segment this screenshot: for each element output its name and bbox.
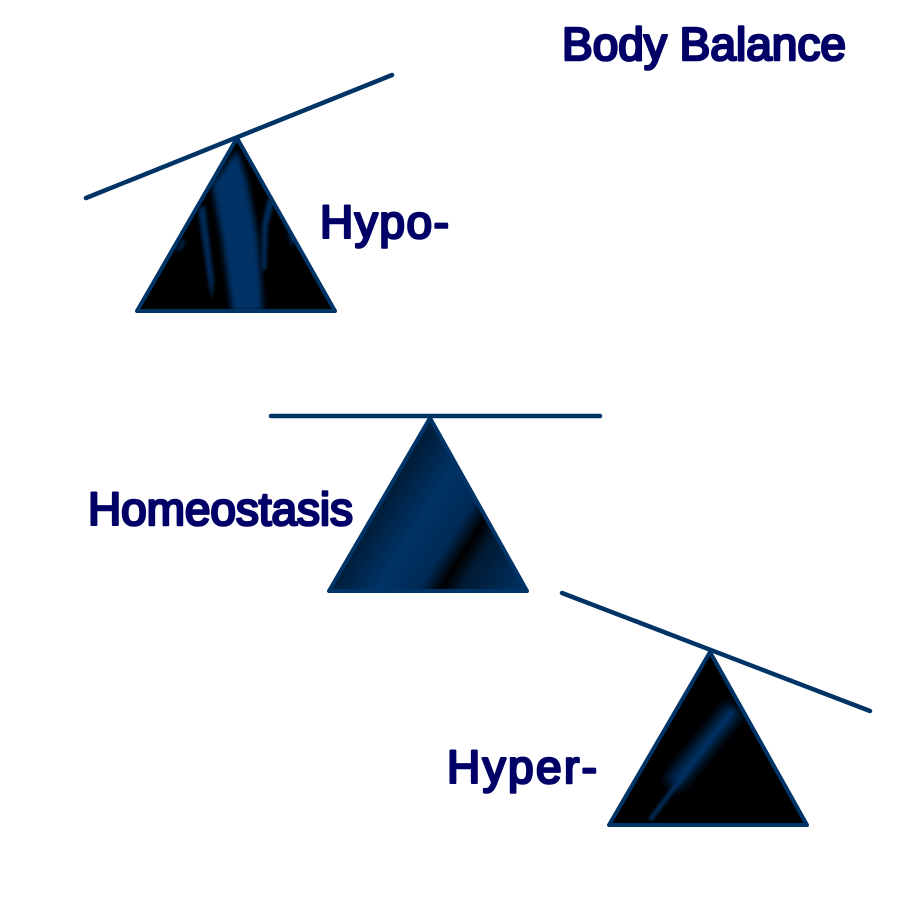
title: Body Balance: [562, 18, 846, 70]
beam: hyper: [562, 593, 870, 711]
beam: homeostasis: [271, 414, 600, 418]
label: Homeostasis: Homeostasis: [88, 483, 353, 535]
label: Hyper-: Hyper-: [447, 741, 597, 793]
beam: hypo: [86, 75, 392, 198]
triangle fulcrum: hyper: [609, 652, 807, 825]
seesaw: hyper state tilted down to the right: [562, 593, 870, 825]
seesaw: hypo state tilted up to the right: [86, 75, 392, 311]
label: Hypo-: Hypo-: [320, 196, 449, 248]
triangle fulcrum: homeostasis: [329, 418, 527, 591]
seesaw: homeostasis state level: [271, 416, 600, 591]
triangle fulcrum: hypo: [137, 138, 335, 311]
